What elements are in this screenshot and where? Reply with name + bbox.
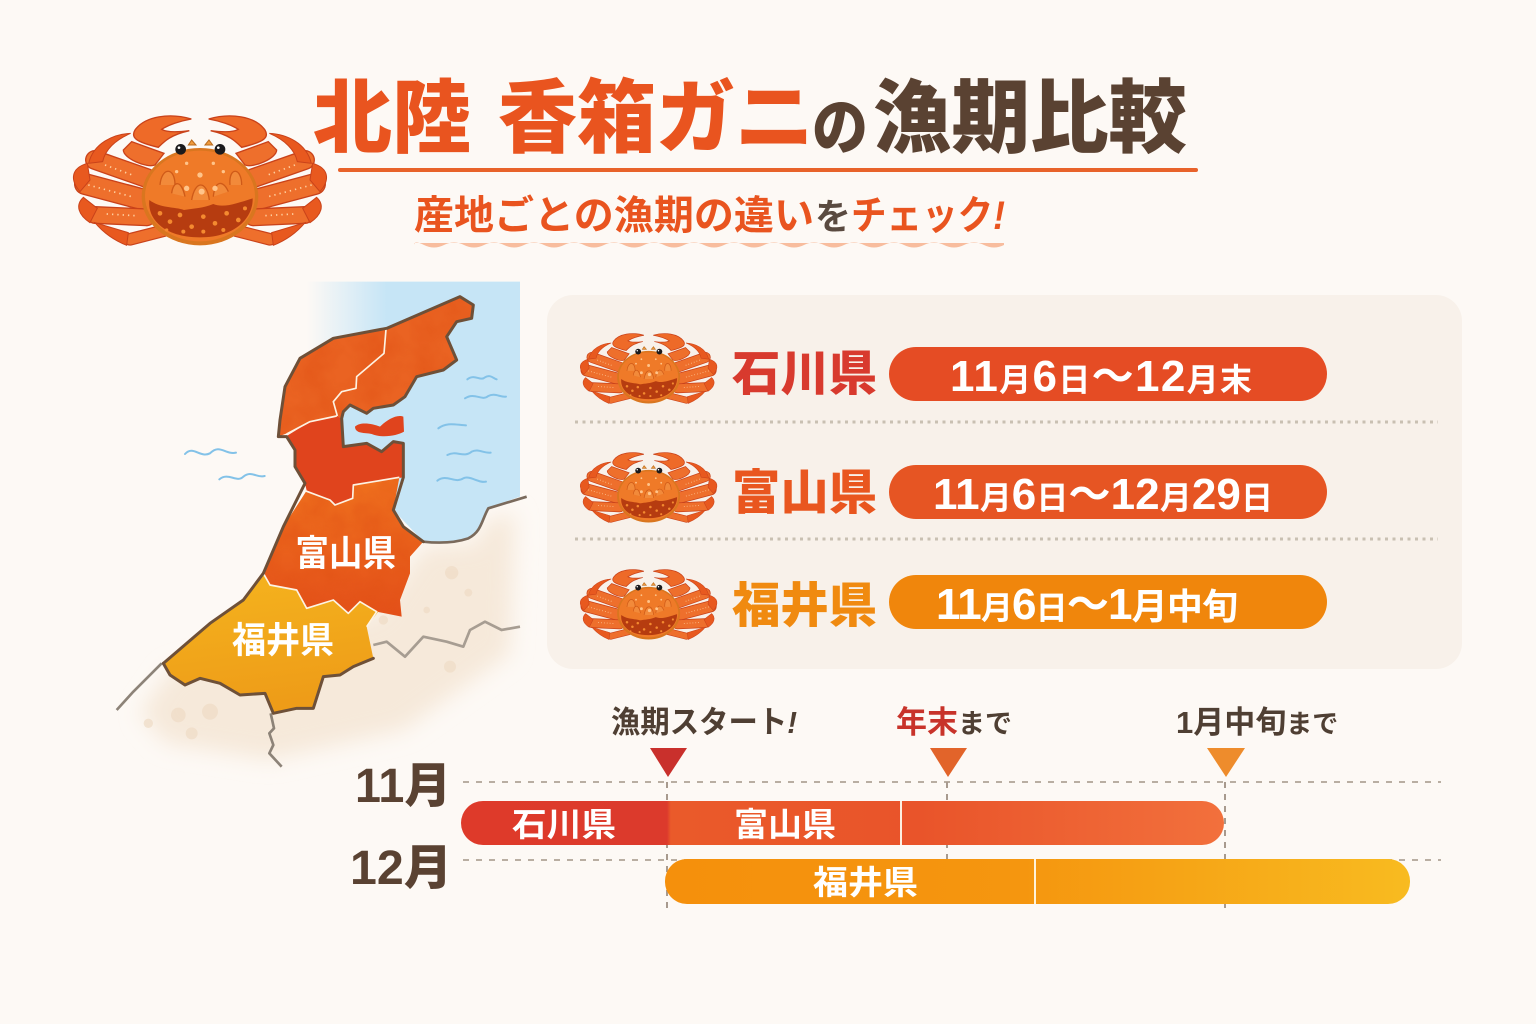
subtitle: 産地ごとの漁期の違い — [414, 194, 814, 238]
row: Fukui — [580, 570, 1327, 639]
row: Ishikawa: 11月6日～12月末 — [950, 352, 1252, 401]
row: Ishikawa — [580, 334, 1327, 403]
region: Noto (Ishikawa north) — [278, 297, 473, 437]
title: 北陸 — [313, 74, 471, 163]
marker: year end arrow — [930, 748, 967, 777]
row: Ishikawa: 石川県 — [732, 348, 877, 401]
land background — [140, 513, 515, 760]
waves — [185, 376, 506, 482]
row: Toyama: 11月6日～12月29日 — [933, 470, 1273, 519]
label: Fukui: 福井県 — [232, 620, 334, 661]
title: の — [812, 94, 868, 163]
bar: Ishikawa and Toyama — [461, 801, 1224, 845]
marker: mid January arrow — [1207, 748, 1245, 777]
white prefecture borders — [263, 329, 399, 627]
timeline chart — [350, 705, 1441, 908]
row: Fukui: 11月6日～1月中旬 — [936, 580, 1238, 629]
subtitle: を — [815, 196, 851, 237]
row: Toyama — [580, 453, 1327, 522]
region: Kaga (Ishikawa south) — [287, 416, 403, 505]
bar: Ishikawa and Toyama: 富山県 — [734, 806, 836, 843]
month label: December: 12月 — [350, 842, 452, 895]
map of Hokuriku — [117, 282, 527, 767]
subtitle: チェック! — [851, 194, 1005, 238]
land borders — [117, 497, 527, 767]
region: Fukui — [163, 573, 378, 713]
coastline — [163, 297, 473, 713]
island — [355, 416, 404, 436]
title — [313, 74, 1187, 163]
marker: start arrow — [650, 748, 687, 777]
title: 漁期比較 — [873, 74, 1187, 163]
row: Toyama: 富山県 — [732, 467, 877, 520]
title: 香箱ガニ — [498, 74, 814, 163]
region: Toyama — [263, 477, 423, 617]
month label: November: 11月 — [355, 760, 451, 813]
icon: large crab — [73, 116, 327, 245]
bar: Ishikawa and Toyama: 石川県 — [512, 806, 616, 843]
marker label: year end: 年末まで — [896, 705, 1012, 740]
bay water — [338, 402, 410, 483]
bar: Fukui: 福井県 — [813, 864, 918, 901]
panel: prefecture seasons — [547, 295, 1462, 669]
label: Toyama: 富山県 — [295, 532, 396, 573]
sea — [307, 282, 520, 543]
row: Fukui: 福井県 — [732, 580, 877, 633]
subtitle — [414, 194, 1005, 238]
bar: Fukui — [665, 859, 1410, 904]
marker label: season start: 漁期スタート! — [611, 705, 797, 740]
marker label: mid January: 1月中旬まで — [1176, 705, 1338, 740]
